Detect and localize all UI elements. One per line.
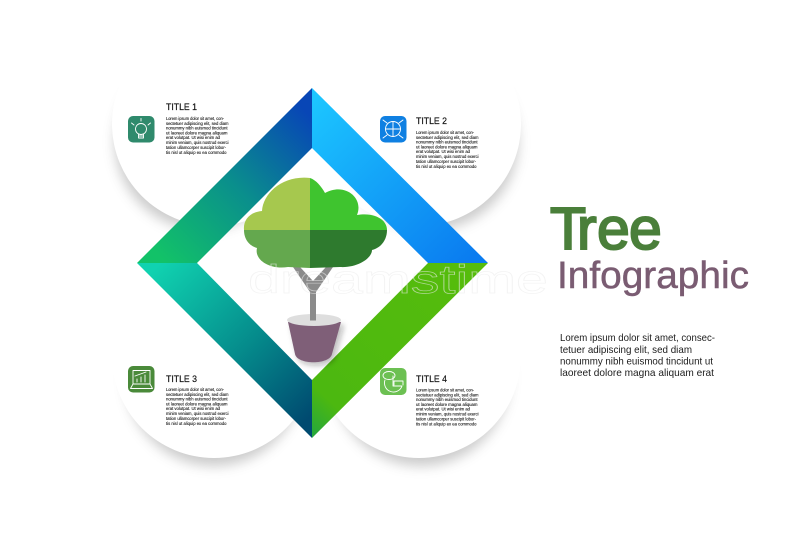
- text block 4: nonummy nibh euismod tincidunt: [416, 397, 478, 402]
- band: top right: [312, 88, 488, 263]
- crown: top right leaf: [310, 178, 387, 230]
- text block 2: ut laoreet dolore magna aliquam: [416, 144, 478, 149]
- text block 1: minim veniam, quis nostrud exerci: [166, 140, 228, 145]
- text block 4: [416, 387, 479, 426]
- item 3: [128, 366, 229, 426]
- heading: Tree: Tree: [550, 196, 662, 262]
- title 3: TITLE 3: [166, 374, 197, 385]
- trunk base: [310, 310, 316, 320]
- description paragraph: tetuer adipiscing elit, sed diam: [560, 344, 692, 356]
- text block 1: sectetuer adipiscing elit, sed diam: [166, 121, 229, 126]
- text block 2: [416, 130, 479, 169]
- crown: bottom right leaf: [310, 230, 387, 268]
- text block 3: [166, 387, 229, 426]
- icon: target arrows: [380, 116, 406, 142]
- text block 3: ut laoreet dolore magna aliquam: [166, 401, 228, 406]
- item 1: [128, 102, 229, 155]
- watermark: dreamstime: [248, 258, 548, 302]
- text block 4: minim veniam, quis nostrud exerci: [416, 412, 478, 416]
- text block 2: sectetuer adipiscing elit, sed diam: [416, 135, 479, 140]
- description paragraph: laoreet dolore magna aliquam erat: [560, 367, 714, 379]
- pot body: [288, 322, 341, 362]
- text block 2: tis nisl ut aliquip ex ea commodo: [416, 164, 477, 169]
- text block 3: minim veniam, quis nostrud exerci: [166, 411, 228, 416]
- text block 2: nonummy nibh euismod tincidunt: [416, 140, 478, 145]
- crown: top left leaf: [244, 178, 310, 230]
- tree illustration: [244, 178, 387, 362]
- text block 3: nonummy nibh euismod tincidunt: [166, 397, 228, 402]
- circle shadows: [115, 54, 518, 466]
- pot rim: [287, 314, 341, 326]
- text block 3: Lorem ipsum dolor sit amet, con-: [166, 387, 224, 392]
- text block 3: sectetuer adipiscing elit, sed diam: [166, 392, 229, 397]
- icon: laptop chart: [128, 366, 154, 392]
- title 1: TITLE 1: [166, 102, 197, 113]
- text block 1: Lorem ipsum dolor sit amet, con-: [166, 116, 224, 121]
- title 2: TITLE 2: [416, 116, 447, 127]
- circle: bottom left: [112, 254, 316, 458]
- text block 2: minim veniam, quis nostrud exerci: [416, 154, 478, 159]
- band: top left: [137, 88, 312, 263]
- crown: bottom left leaf: [244, 230, 310, 268]
- text block 4: tation ullamcorper suscipit lobor-: [416, 416, 476, 421]
- text block 3: erat volutpat. Ut wisi enim ad: [166, 406, 220, 411]
- text block 1: tation ullamcorper suscipit lobor-: [166, 145, 226, 150]
- text block 3: tis nisl ut aliquip ex ea commodo: [166, 421, 227, 426]
- description paragraph: nonummy nibh euismod tincidunt ut: [560, 356, 713, 368]
- trunk: [293, 267, 333, 320]
- circle: bottom right: [317, 254, 521, 458]
- item 2: [380, 116, 479, 169]
- description paragraph: [560, 332, 715, 379]
- text block 4: ut laoreet dolore magna aliquam: [416, 402, 478, 407]
- text block 1: tis nisl ut aliquip ex ea commodo: [166, 150, 227, 155]
- text block 1: ut laoreet dolore magna aliquam: [166, 130, 228, 135]
- white circles: [112, 22, 521, 458]
- circle: top right: [317, 22, 521, 226]
- heading: Infographic: Infographic: [557, 255, 749, 297]
- text block 2: tation ullamcorper suscipit lobor-: [416, 159, 476, 164]
- text block 3: tation ullamcorper suscipit lobor-: [166, 416, 226, 421]
- item 4: [380, 368, 479, 426]
- text block 1: [166, 116, 229, 155]
- icon: light bulb: [128, 116, 154, 142]
- circle: top left: [112, 22, 316, 226]
- text block 1: nonummy nibh euismod tincidunt: [166, 126, 228, 131]
- text block 4: Lorem ipsum dolor sit amet, con-: [416, 387, 474, 392]
- text block 4: erat volutpat. Ut wisi enim ad: [416, 407, 470, 412]
- text block 2: erat volutpat. Ut wisi enim ad: [416, 149, 470, 154]
- text block 4: tis nisl ut aliquip ex ea commodo: [416, 421, 477, 426]
- title 4: TITLE 4: [416, 374, 447, 385]
- text block 2: Lorem ipsum dolor sit amet, con-: [416, 130, 474, 135]
- band: bottom left: [137, 263, 312, 438]
- text block 4: sectetuer adipiscing elit, sed diam: [416, 392, 479, 397]
- description paragraph: Lorem ipsum dolor sit amet, consec-: [560, 332, 715, 344]
- icon: pie chart: [380, 368, 406, 395]
- text block 1: erat volutpat. Ut wisi enim ad: [166, 135, 220, 140]
- band: bottom right: [312, 263, 488, 438]
- diamond frame: [137, 88, 488, 438]
